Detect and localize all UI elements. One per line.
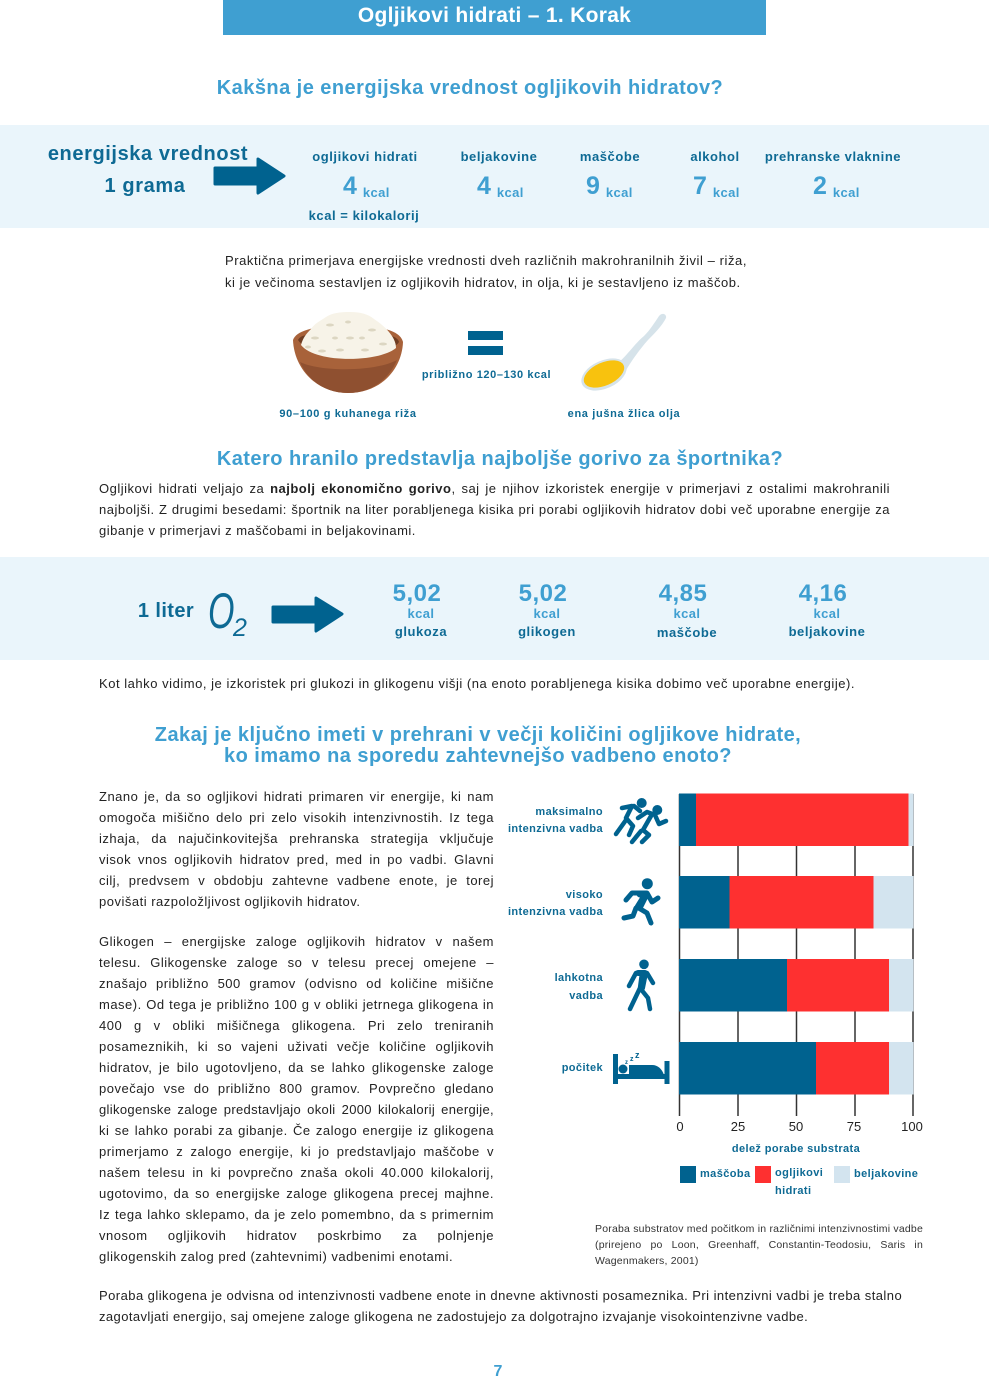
item: fats: 9 kcal: [586, 172, 633, 200]
value: fats: [657, 580, 717, 640]
item: alcohol: 7 kcal: [693, 172, 740, 200]
label: 1 liter: 1 liter: [138, 600, 194, 622]
value: proteins: kcal: [814, 606, 840, 621]
panel: energy value per gram: [0, 125, 989, 228]
value: fats: 4,85: [659, 580, 707, 607]
figure caption: Poraba substratov med počitkom in različnimi intenzivnostimi vadbe: [595, 1223, 923, 1235]
text: carbohydrates as energy source: povišati razpoložljivost ogljikovih hidratov.: [99, 894, 360, 909]
chart label: maximal: intenzivna vadba: [508, 822, 603, 834]
item: dietary fibre: 2 kcal: [813, 172, 860, 200]
bar: high intensity: [679, 876, 914, 928]
text: glycogen: Iz tega lahko sklepamo, da je zelo pomembno, da s primernim: [99, 1207, 494, 1222]
value: glycogen: glikogen: [518, 624, 576, 639]
item: fats: maščobe: [580, 149, 640, 164]
heading: best fuel: Katero hranilo predstavlja najboljše gorivo za športnika?: [217, 448, 783, 470]
chart label: high: [508, 889, 603, 918]
text: glycogen: glikogenskih zalog pred (zahtevnimi) vadbenimi enotami.: [99, 1249, 453, 1264]
chart label: high: visoko: [566, 889, 603, 901]
item: proteins: [461, 149, 537, 200]
chart label: rest: počitek: [562, 1062, 603, 1074]
header banner: [223, 0, 766, 35]
label: calories: približno 120–130 kcal: [422, 369, 551, 381]
legend: carbohydrates: ogljikovi: [775, 1167, 823, 1179]
value: proteins: 4,16: [799, 580, 847, 607]
item: fats: [580, 149, 640, 200]
figure caption: (prirejeno po Loon, Greenhaff, Constantin-Teodosiu, Saris in: [595, 1239, 923, 1251]
paragraph: carbohydrates as fuel: gibanje v primerjavi z maščobami in beljakovinami.: [99, 523, 416, 538]
heading: why carbohydrates: ko imamo na sporedu zahtevnejšo vadbeno enoto?: [224, 745, 732, 767]
chart label: high: intenzivna vadba: [508, 906, 603, 918]
chart label: maximal: [508, 806, 603, 834]
text: conclusion: Kot lahko vidimo, je izkoristek pri glukozi in glikogenu višji (na enoto porabljenega kisika dobimo več uporabne energije).: [99, 676, 855, 691]
text: glycogen: ugotovimo, da so energijske zaloge glikogena precej majhne.: [99, 1186, 494, 1201]
chart label: light: lahkotna: [555, 972, 603, 984]
icon: runner: [624, 878, 658, 923]
text: glycogen: vnosom ogljikovih hidratov poskrbimo za polnjenje: [99, 1228, 494, 1243]
axis labels: 25: [731, 1119, 745, 1134]
text: glycogen: ki se lahko porabi za gibanje. Če zalogo energije iz glikogena: [99, 1123, 494, 1138]
icon: sleeping in bed: [613, 1050, 670, 1084]
arrow: [272, 596, 344, 633]
icon: sleeping in bed: z: [630, 1056, 634, 1063]
icon: bowl of rice: [293, 312, 403, 393]
text: glycogen: primerjamo z zalogo energije, ki jo predstavljajo maščobe v: [99, 1144, 494, 1159]
legend: fat: [680, 1166, 750, 1183]
intro text: Praktična primerjava energijske vrednosti dveh različnih makrohranilnih živil – riža,: [225, 253, 747, 268]
item: alcohol: [690, 149, 740, 200]
figure caption: Wagenmakers, 2001): [595, 1255, 699, 1267]
symbol: O2: 2: [233, 614, 247, 642]
value: glucose: glukoza: [395, 624, 447, 639]
caption: oil: ena jušna žlica olja: [568, 408, 680, 420]
value: glucose: kcal: [408, 606, 434, 621]
text: glycogen: glikogenske zaloge predstavljajo okoli 2000 kilokalorij energije,: [99, 1102, 494, 1117]
text: carbohydrates as energy source: [99, 789, 494, 909]
symbol: O2: [208, 583, 247, 642]
intro text: [225, 253, 747, 290]
axis labels: 0: [676, 1119, 684, 1134]
paragraph: carbohydrates as fuel: [99, 481, 890, 538]
icon: spoon of oil: [581, 314, 666, 391]
text: glycogen: našem telesu in ki povprečno znaša okoli 40.000 kilokalorij,: [99, 1165, 494, 1180]
chart label: maximal: maksimalno: [535, 806, 603, 818]
axis title: delež porabe substrata: [732, 1143, 860, 1155]
text: glycogen: 400 g v obliki mišičnega glikogena. Pri zelo treniranih: [99, 1018, 494, 1033]
axis labels: [676, 1119, 923, 1134]
page number: 7: [494, 1363, 502, 1380]
chart: substrate use by intensity: [508, 794, 923, 1196]
icon: sleeping in bed: z: [625, 1060, 628, 1066]
icon: sleeping in bed: z: [635, 1050, 640, 1060]
legend: proteins: [834, 1166, 918, 1183]
legend: carbohydrates: hidrati: [775, 1184, 811, 1196]
text: carbohydrates as energy source: cilj, predvsem v obdobju zahtevne vadbene enote, je torej: [99, 873, 494, 888]
text: glycogen: [99, 934, 494, 1264]
item: alcohol: alkohol: [690, 149, 740, 164]
closing paragraph: [99, 1288, 902, 1324]
stacked bars and axis: [613, 794, 914, 1116]
value: glycogen: kcal: [534, 606, 560, 621]
label: energy value of 1 gram: energijska vrednost: [48, 143, 248, 165]
item: dietary fibre: [765, 149, 901, 200]
chart label: light: vadba: [569, 990, 603, 1002]
symbol: O2: O: [208, 583, 234, 639]
intro text: ki je večinoma sestavljen iz ogljikovih hidratov, in olja, ki je sestavljeno iz maščob.: [225, 275, 741, 290]
icon: two runners: [616, 798, 666, 842]
closing paragraph: Poraba glikogena je odvisna od intenzivnosti vadbene enote in dnevne aktivnosti posameznika. Pri intenzivni vadbi je treba stalno: [99, 1288, 902, 1303]
note: kcal definition: kcal = kilokalorij: [309, 208, 419, 223]
axis labels: 75: [847, 1119, 861, 1134]
text: glycogen: Glikogen – energijske zaloge ogljikovih hidratov v našem: [99, 934, 494, 949]
bar: maximal intensity: [679, 794, 914, 846]
figure caption: [595, 1223, 923, 1267]
axis labels: 50: [789, 1119, 803, 1134]
header banner: Ogljikovi hidrati – 1. Korak: [358, 4, 631, 27]
closing paragraph: zagotavljati energijo, saj omejene zaloge glikogena ne zadostujejo za dolgotrajno izvajanje visokointenzivne vadbe.: [99, 1309, 808, 1324]
paragraph: carbohydrates as fuel: najboljši. Z drugimi besedami: športnik na liter porabljenega kisika pri porabi ogljikovih hidratov dobi več uporabne energije za: [99, 502, 890, 517]
item: carbohydrates: [312, 149, 418, 200]
paragraph: carbohydrates as fuel: Ogljikovi hidrati veljajo za najbolj ekonomično gorivo, saj je njihov izkoristek energije v primerjavi z ostalimi makrohranili: [99, 481, 890, 496]
item: dietary fibre: prehranske vlaknine: [765, 149, 901, 164]
text: carbohydrates as energy source: Znano je, da so ogljikovi hidrati primaren vir energije, ki nam: [99, 789, 494, 804]
text: glycogen: hidratov, je bilo ugotovljeno, da se lahko glikogenske zaloge: [99, 1060, 494, 1075]
value: glucose: [393, 580, 447, 639]
text: glycogen: mase). Od tega je približno 100 g v obliki jetrnega glikogena in: [99, 997, 494, 1012]
text: glycogen: telesu. Glikogenske zaloge so v telesu precej omejene –: [99, 955, 494, 970]
heading: why carbohydrates: [155, 724, 801, 767]
item: proteins: 4 kcal: [477, 172, 524, 200]
text: glycogen: znašajo približno 500 gramov (odvisno od količine mišične: [99, 976, 494, 991]
value: glycogen: 5,02: [519, 580, 567, 607]
text: glycogen: posameznikih, ki so vajeni uživati večje količine ogljikovih: [99, 1039, 494, 1054]
icon: walker: [629, 960, 653, 1009]
value: proteins: beljakovine: [789, 624, 865, 639]
value: glycogen: [518, 580, 576, 639]
label: 1 gram: 1 grama: [105, 175, 185, 197]
legend: [680, 1166, 918, 1196]
text: carbohydrates as energy source: izhaja, da najučinkovitejša prehranska strategija vključuje: [99, 831, 494, 846]
value: fats: maščobe: [657, 625, 717, 640]
bar: rest: [679, 1042, 914, 1094]
legend: proteins: beljakovine: [854, 1168, 918, 1180]
text: glycogen: povečajo vse do približno 800 gramov. Povprečno gledano: [99, 1081, 494, 1096]
caption: rice: 90–100 g kuhanega riža: [279, 408, 417, 420]
panel: energy per liter of oxygen: [0, 557, 989, 660]
heading: energy value: Kakšna je energijska vrednost ogljikovih hidratov?: [217, 77, 723, 99]
legend: fat: maščoba: [700, 1168, 750, 1180]
text: carbohydrates as energy source: visok vnos ogljikovih hidratov pred, med in po vadbi. Glavni: [99, 852, 494, 867]
axis labels: 100: [901, 1119, 923, 1134]
item: carbohydrates: 4 kcal: [343, 172, 390, 200]
value: proteins: [789, 580, 865, 639]
legend: carbohydrates: [755, 1166, 823, 1196]
text: carbohydrates as energy source: omogoča mišično delo pri zelo visokih intenzivnostih. Iz tega: [99, 810, 494, 825]
item: proteins: beljakovine: [461, 149, 537, 164]
bar: light exercise: [679, 959, 914, 1012]
arrow: [214, 158, 286, 195]
chart label: light: [555, 972, 603, 1002]
item: carbohydrates: ogljikovi hidrati: [312, 149, 418, 164]
value: glucose: 5,02: [393, 580, 441, 607]
value: fats: kcal: [674, 606, 700, 621]
icon: equals sign: [468, 331, 503, 355]
heading: why carbohydrates: Zakaj je ključno imeti v prehrani v večji količini ogljikove hidrate,: [155, 724, 801, 746]
